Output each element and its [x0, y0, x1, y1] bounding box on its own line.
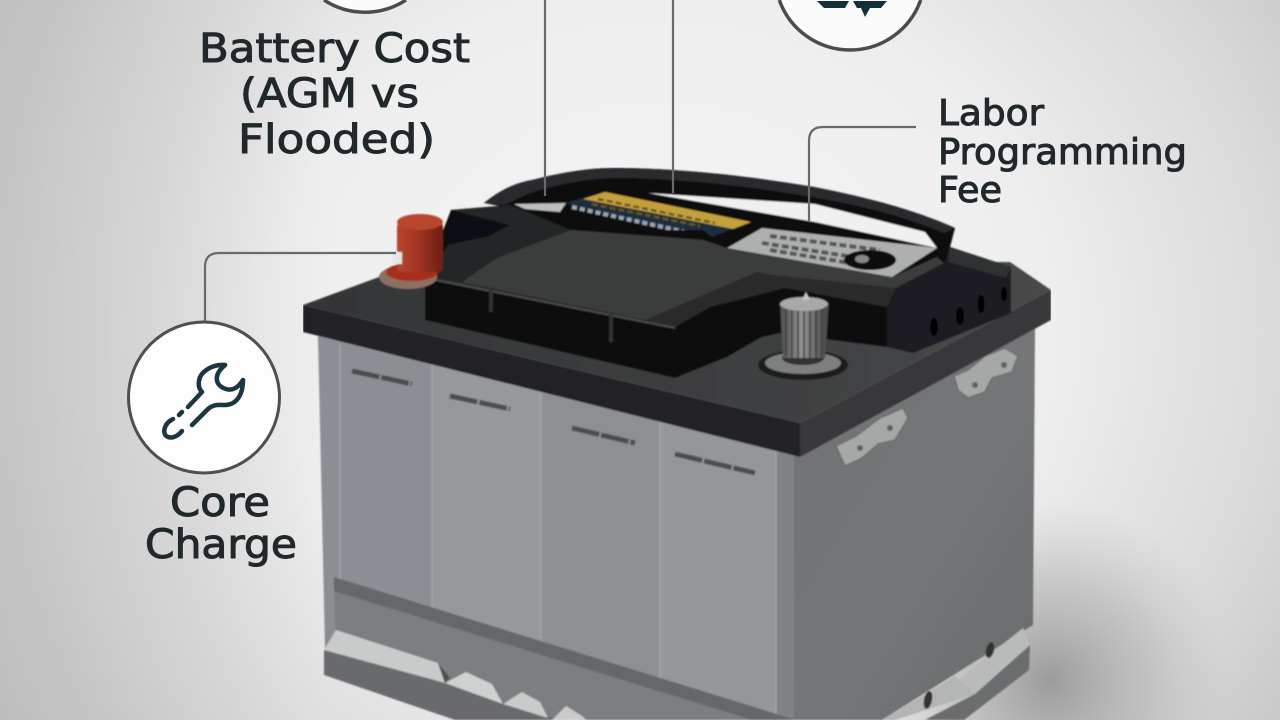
battery illustration	[303, 168, 1051, 720]
heading: core charge: Core	[170, 480, 270, 526]
panel: battery right face	[794, 328, 1035, 720]
base rails	[324, 628, 1030, 720]
connector: center label	[672, 0, 674, 193]
right block	[887, 247, 1011, 353]
side clips	[836, 348, 1018, 466]
front rim	[425, 272, 896, 327]
panel: black cover	[425, 205, 1011, 378]
heading: core charge: Charge	[145, 522, 297, 568]
heading: battery cost: Battery Cost	[199, 26, 470, 72]
connector: battery cost	[544, 0, 546, 196]
panel: battery front face	[318, 335, 796, 720]
dark moulded band	[334, 577, 796, 720]
heading: battery cost: (AGM vs	[240, 71, 419, 117]
connector: core charge	[205, 253, 396, 322]
icon: steel negative terminal	[758, 292, 848, 380]
icon: top right recycle circle	[779, 0, 921, 50]
icon: core charge wrench	[128, 322, 280, 473]
heading: core charge	[145, 480, 297, 568]
lighter cover panel	[462, 230, 944, 320]
icon: red positive terminal	[379, 214, 443, 289]
heading: labor programming fee: Programming	[938, 132, 1187, 173]
panel: info label	[727, 228, 937, 277]
panel: lid	[303, 262, 1051, 457]
left raised piece	[428, 205, 571, 282]
connector: labor programming fee	[809, 127, 916, 222]
icon: top left circle	[324, 0, 406, 12]
heading: labor programming fee: Labor	[938, 93, 1044, 134]
black walls	[425, 205, 1011, 378]
heading: labor programming fee: Fee	[938, 170, 1002, 211]
heading: battery cost: Flooded)	[238, 117, 435, 163]
heading: battery cost	[199, 26, 470, 163]
heading: labor programming fee	[938, 93, 1187, 211]
floor shadow	[870, 500, 1230, 720]
vent slits	[352, 371, 755, 473]
panel: top label	[514, 192, 751, 240]
battery handle	[484, 168, 955, 280]
